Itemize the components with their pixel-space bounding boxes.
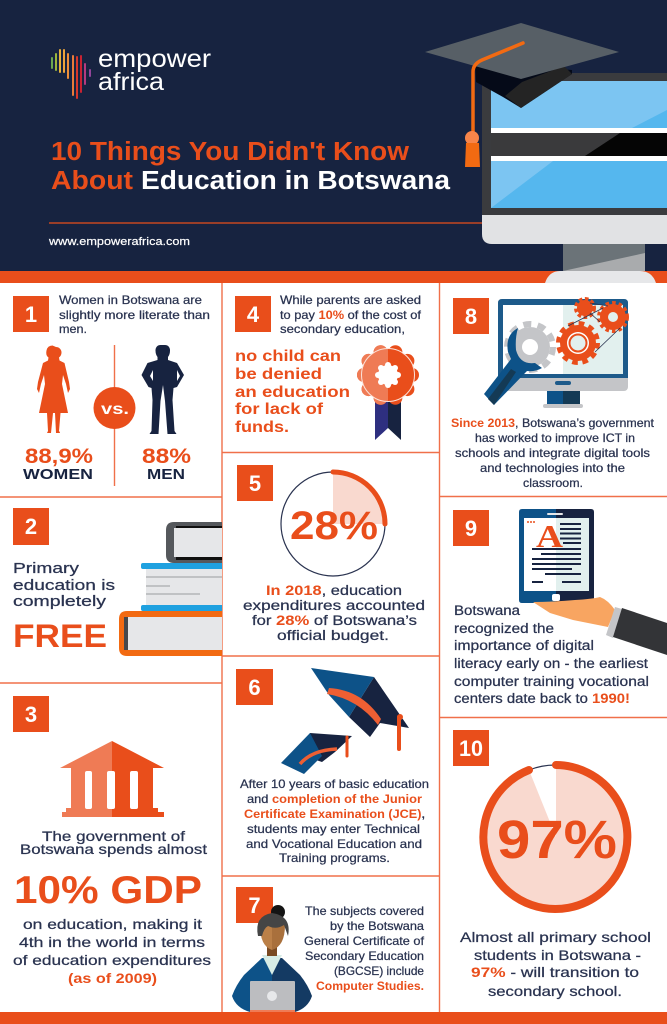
fact 7 text: General Certificate of xyxy=(304,934,425,948)
fact 1 text: men. xyxy=(59,322,87,336)
fact 4 text: While parents are asked xyxy=(280,293,421,307)
panel: fact 9 xyxy=(453,509,667,706)
fact 10 text: Almost all primary school xyxy=(460,929,651,945)
fact 5 text: In 2018 , education xyxy=(266,583,402,598)
women stat xyxy=(23,445,93,483)
panel: fact 7 xyxy=(232,887,425,1012)
title: Education in Botswana xyxy=(141,167,451,195)
fact 2 text xyxy=(13,561,115,610)
panel: fact 8 xyxy=(451,298,655,490)
logo wordmark: empower xyxy=(98,45,211,73)
icon: monitor with gears and wrench xyxy=(484,299,628,408)
fact 8 text: Since 2013, Botswana’s government xyxy=(451,416,655,430)
bottom band xyxy=(0,1012,667,1024)
fact 10 text xyxy=(460,929,651,999)
logo wordmark: africa xyxy=(98,68,164,96)
icon: tablet in hand xyxy=(519,509,667,655)
FREE: FREE xyxy=(13,618,107,654)
fact 3 detail text xyxy=(13,916,211,986)
fact 9 text: Botswana xyxy=(454,603,521,618)
fact 9 text: recognized the xyxy=(454,621,554,636)
men stat xyxy=(142,445,191,483)
icon: government building xyxy=(60,741,164,817)
fact 2 text: Primary xyxy=(13,561,80,577)
header banner xyxy=(0,0,667,271)
icon: computer monitor with Botswana flag xyxy=(482,73,667,271)
logo xyxy=(52,45,211,98)
10% GDP: 10% GDP xyxy=(14,869,202,912)
fact 3 intro text: Botswana spends almost xyxy=(20,841,207,857)
number 10: 10 xyxy=(459,736,483,761)
fact 5 text: official budget. xyxy=(277,628,389,643)
panel: fact 2 xyxy=(13,508,240,656)
logo mark xyxy=(52,50,90,98)
fact 10 text: secondary school. xyxy=(488,983,622,999)
panel: fact 6 xyxy=(236,668,429,865)
fact 4 highlight: be denied xyxy=(235,366,322,383)
number 2: 2 xyxy=(25,514,37,539)
number 4 xyxy=(235,296,271,332)
fact 9 text xyxy=(454,603,649,706)
number 6 xyxy=(236,669,273,705)
donut chart: 97%: 97% xyxy=(497,810,617,870)
fact 7 text: Secondary Education xyxy=(305,949,424,963)
fact 9 text: computer training vocational xyxy=(454,674,649,689)
fact 8 text: has worked to improve ICT in xyxy=(475,431,635,445)
fact 7 text: by the Botswana xyxy=(330,919,424,933)
number 1: 1 xyxy=(25,302,37,327)
number 4: 4 xyxy=(247,302,260,327)
fact 5 text xyxy=(243,583,425,643)
number 7: 7 xyxy=(248,893,261,918)
fact 7 text xyxy=(304,904,425,993)
fact 3 detail text: of education expenditures xyxy=(13,952,211,968)
fact 6 text: and Vocational Education and xyxy=(246,837,422,851)
number 7 xyxy=(236,887,273,923)
women stat: 88,9% xyxy=(25,445,93,468)
fact 3 detail text: on education, making it xyxy=(23,916,202,932)
fact 4 text: to pay 10% of the cost of xyxy=(280,308,422,322)
icon: woman xyxy=(37,346,70,433)
panel: fact 3 xyxy=(13,696,211,986)
icon: man xyxy=(142,345,184,434)
fact 6 text: Certificate Examination (JCE) , xyxy=(244,807,425,821)
icon: graduation cap xyxy=(425,23,619,167)
women stat: WOMEN xyxy=(23,466,93,483)
fact 6 text: students may enter Technical xyxy=(247,822,420,836)
fact 9 text: literacy early on - the earliest xyxy=(454,656,648,671)
men stat: 88% xyxy=(142,445,191,468)
fact 4 text xyxy=(280,293,422,336)
fact 1 text xyxy=(59,293,210,336)
fact 2 text: completely xyxy=(13,594,107,610)
fact 6 text: Training programs. xyxy=(279,851,390,865)
number 8: 8 xyxy=(465,304,477,329)
fact 7 text: Computer Studies. xyxy=(316,979,424,993)
fact 10 text: 97% - will transition to xyxy=(471,964,639,980)
fact 10 text: students in Botswana - xyxy=(474,947,641,963)
number 5 xyxy=(237,465,273,501)
logo wordmark xyxy=(98,45,211,96)
donut chart: 97% xyxy=(483,765,627,909)
fact 9 text: centers date back to 1990! xyxy=(454,691,630,706)
number 3 xyxy=(13,696,49,732)
icon: stack of books xyxy=(119,522,222,656)
fact 7 text: The subjects covered xyxy=(305,904,424,918)
fact 1 text: Women in Botswana are xyxy=(59,293,202,307)
title xyxy=(51,138,451,195)
fact 4 text: secondary education, xyxy=(280,322,405,336)
icon: small graduation cap xyxy=(281,733,352,774)
fact 3 detail text: 4th in the world in terms xyxy=(19,934,205,950)
vs badge xyxy=(94,387,136,429)
icon: large graduation cap xyxy=(311,668,409,749)
fact 6 text xyxy=(240,777,429,865)
fact 6 text: and completion of the Junior xyxy=(247,792,422,806)
orange band xyxy=(0,271,667,283)
fact 9 text: importance of digital xyxy=(454,638,594,653)
number 10 xyxy=(453,730,489,766)
fact 7 text: (BGCSE) include xyxy=(334,964,424,978)
number 9: 9 xyxy=(465,516,477,541)
panel: fact 5 xyxy=(237,465,425,643)
website: www.empowerafrica.com xyxy=(48,236,190,248)
panel: fact 1 xyxy=(13,293,210,486)
fact 3 detail text: (as of 2009) xyxy=(68,970,157,986)
fact 8 text: and technologies into the xyxy=(480,461,625,475)
number 6: 6 xyxy=(248,675,261,700)
fact 3 intro text: The government of xyxy=(42,828,185,844)
fact 8 text: schools and integrate digital tools xyxy=(455,446,650,460)
vs badge: vs. xyxy=(101,401,129,418)
number 1 xyxy=(13,296,49,332)
icon: award ribbon xyxy=(357,345,419,440)
donut chart: 28% xyxy=(281,472,385,576)
number 5: 5 xyxy=(249,471,261,496)
fact 5 text: expenditures accounted xyxy=(243,598,425,613)
fact 3 intro text xyxy=(20,828,207,857)
number 9 xyxy=(453,510,489,546)
fact 4 highlight xyxy=(235,348,350,436)
panel: fact 10 xyxy=(453,730,651,999)
title: 10 Things You Didn't Know xyxy=(51,138,409,166)
fact 1 text: slightly more literate than xyxy=(59,308,210,322)
number 8 xyxy=(453,298,489,334)
donut chart: 28%: 28% xyxy=(290,504,378,548)
fact 4 highlight: an education xyxy=(235,384,350,401)
fact 4 highlight: no child can xyxy=(235,348,341,365)
fact 8 text xyxy=(451,416,655,490)
fact 5 text: for 28% of Botswana’s xyxy=(252,613,417,628)
fact 4 highlight: for lack of xyxy=(235,401,324,418)
fact 8 text: classroom. xyxy=(523,476,583,490)
number 2 xyxy=(13,508,49,545)
fact 4 highlight: funds. xyxy=(235,419,289,436)
title: About xyxy=(51,167,134,195)
icon: tablet in hand: A xyxy=(536,518,563,554)
fact 6 text: After 10 years of basic education xyxy=(240,777,429,791)
number 3: 3 xyxy=(25,702,37,727)
fact 2 text: education is xyxy=(13,578,115,594)
panel: fact 4 xyxy=(235,293,422,440)
men stat: MEN xyxy=(147,466,185,483)
icon: student with laptop xyxy=(232,905,312,1012)
